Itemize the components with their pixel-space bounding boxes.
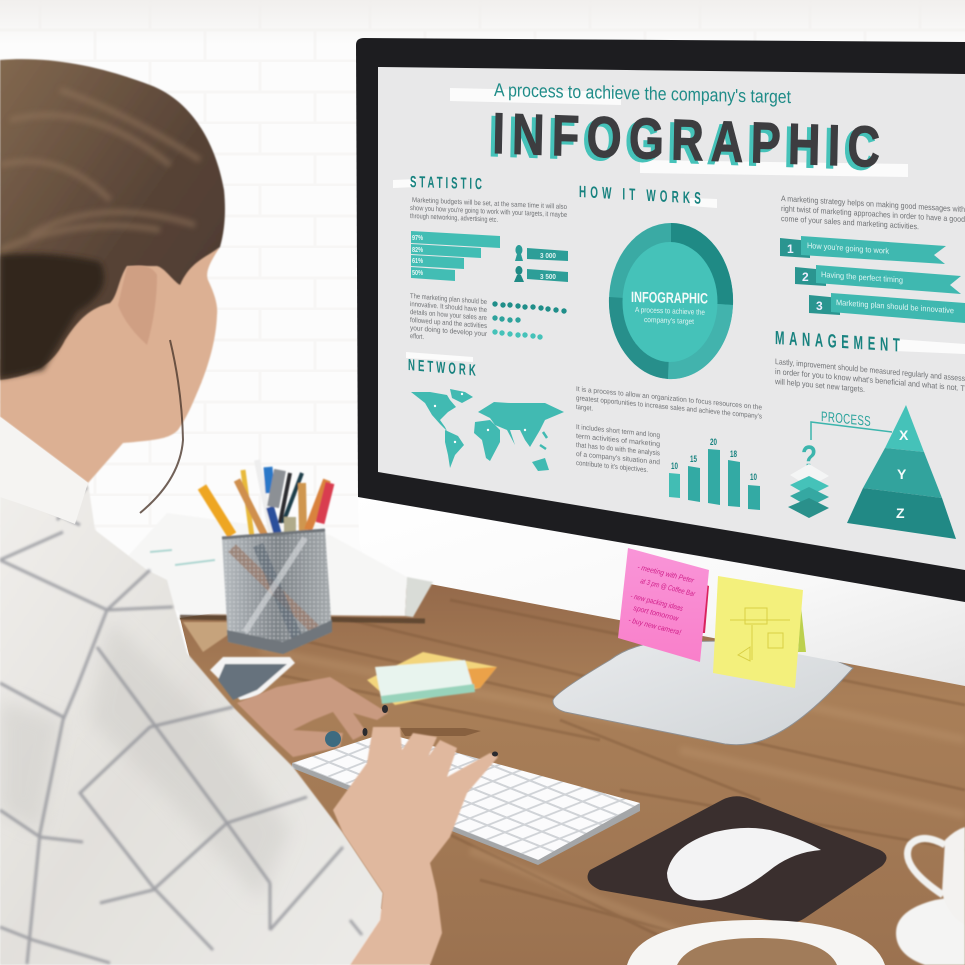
- upper hand: [237, 677, 388, 757]
- marketing strategy paragraph: [781, 194, 965, 231]
- statistic section: [410, 172, 568, 341]
- marketing plan paragraph: details on how your sales are: [410, 309, 487, 322]
- how it works heading: HOW IT WORKS: [579, 182, 701, 207]
- pyramid diagram: Z: [896, 505, 905, 521]
- people icons with counts: [514, 245, 568, 282]
- marketing strategy paragraph: come of your sales and marketing activities.: [781, 214, 919, 231]
- main title: INFOGRAPHIC: [492, 102, 881, 180]
- process heading: PROCESS: [821, 408, 871, 429]
- bar chart: 10: [750, 472, 757, 482]
- subtitle: A process to achieve the company's target: [494, 79, 791, 107]
- process paragraph: target.: [576, 404, 593, 413]
- yellow sticky note: [713, 576, 803, 688]
- pencil cup with pencils: [202, 460, 332, 654]
- percentage bars: 97%: [412, 235, 424, 242]
- ribbon 1: How you're going to work: [807, 241, 890, 256]
- pink note shadow: [700, 584, 709, 633]
- keyboard: [292, 733, 640, 865]
- right column: [774, 194, 965, 539]
- icon: question mark on layered stack: ?: [801, 439, 817, 475]
- white highlight strips: [393, 88, 965, 362]
- percentage bars: 61%: [412, 258, 424, 265]
- sticky notes: [618, 548, 806, 688]
- mouse pad and mouse: [588, 796, 887, 923]
- monitor black bezel: [356, 38, 965, 602]
- marketing plan paragraph: The marketing plan should be: [410, 293, 487, 306]
- desk phone: [210, 657, 295, 700]
- world map: [411, 389, 564, 471]
- statistic paragraph: through networking, advertising etc.: [410, 213, 498, 224]
- short term paragraph: [576, 424, 660, 474]
- pink sticky note: sport tomorrow: [633, 603, 680, 623]
- bar chart: 10: [671, 461, 678, 471]
- short term paragraph: contribute to it's objectives.: [576, 460, 648, 474]
- donut subtitle: [635, 305, 705, 326]
- percentage bars: [411, 231, 500, 281]
- pencil on desk: [400, 728, 481, 736]
- bar chart: 20: [710, 437, 717, 447]
- short term paragraph: of a company's situation and: [576, 451, 660, 466]
- icon: person 2: [514, 266, 524, 282]
- pink sticky note: - buy new camera!: [628, 615, 682, 637]
- main title: INFOGRAPHIC: [488, 105, 877, 183]
- donut subtitle: company's target: [644, 315, 695, 326]
- short term paragraph: term activities of marketing: [576, 433, 660, 448]
- management paragraph: will help you set new targets.: [774, 377, 865, 394]
- wooden desk: [180, 582, 965, 965]
- ribbon 2: Having the perfect timing: [821, 270, 903, 285]
- hair strands: [0, 90, 200, 250]
- wisp of hair: [140, 340, 183, 513]
- icon: white mouse: [667, 828, 821, 900]
- hair: [0, 59, 225, 380]
- network section: [408, 355, 564, 471]
- ribbon 3: Marketing plan should be innovative: [836, 298, 955, 315]
- marketing plan paragraph: [410, 293, 488, 341]
- icon: person 1: [515, 245, 523, 261]
- dot rating rows: [492, 301, 567, 340]
- donut subtitle: A process to achieve the: [635, 305, 705, 317]
- percentage bars: 50%: [412, 270, 424, 277]
- short term paragraph: that has to do with the analysis: [576, 442, 660, 457]
- shirt: [0, 417, 383, 965]
- people icons with counts: 3 500: [540, 272, 556, 281]
- pyramid diagram: Y: [897, 466, 907, 482]
- short term paragraph: It includes short term and long: [576, 424, 660, 439]
- percentage bars: 82%: [412, 247, 424, 254]
- icon: question mark on layered stack: [788, 439, 829, 518]
- ear: [118, 266, 157, 345]
- shirt plaid lines: [0, 487, 362, 964]
- statistic paragraph: show you how you're going to work with your targets, it maybe: [410, 205, 567, 219]
- shirt fold shading: [0, 620, 290, 900]
- pyramid diagram: X: [899, 427, 909, 443]
- pink sticky note: at 3 pm @ Coffee Bar: [640, 576, 696, 598]
- marketing plan paragraph: your doing to develop your: [410, 325, 488, 338]
- collar: [0, 417, 88, 524]
- marketing plan paragraph: innovative. It should have the: [410, 301, 487, 314]
- open book and papers behind pencil cup: [128, 513, 433, 652]
- marketing plan paragraph: followed up and the activities: [410, 317, 487, 330]
- ribbon 2: [795, 265, 961, 294]
- statistic paragraph: Marketing budgets will be set, at the same time it will also: [412, 197, 567, 211]
- pink sticky note: - meeting with Peter: [637, 562, 695, 585]
- people icons with counts: 3 000: [540, 251, 556, 260]
- monitor white chin: [358, 495, 965, 686]
- hair bun shadow: [0, 254, 104, 378]
- monitor: [356, 38, 965, 745]
- screen: [378, 67, 965, 570]
- lower hand and forearm: [333, 727, 498, 965]
- network heading: NETWORK: [408, 355, 476, 379]
- monitor stand: [553, 640, 853, 745]
- woman at desk: [0, 59, 498, 965]
- bar chart: 18: [730, 449, 737, 459]
- donut diagram: [609, 223, 733, 379]
- neck and face skin: [0, 230, 220, 483]
- ribbon 1: [780, 236, 946, 264]
- marketing plan paragraph: effort.: [410, 333, 424, 341]
- pink sticky note: [618, 548, 709, 662]
- infographic on screen: [393, 79, 965, 539]
- donut title: INFOGRAPHIC: [631, 289, 708, 308]
- bar chart: [669, 437, 760, 510]
- coffee cup and saucer: [896, 827, 965, 965]
- nail polish: [325, 705, 498, 756]
- management heading: MANAGEMENT: [775, 328, 900, 356]
- process paragraph: It is a process to allow an organization to focus resources on the: [576, 386, 762, 412]
- sticky note pad: [367, 652, 497, 705]
- ribbon 3: [809, 293, 965, 323]
- process paragraph: greatest opportunities to increase sales and achieve the company's: [576, 395, 762, 421]
- pink sticky note: - new packing ideas: [630, 591, 684, 613]
- statistic heading: STATISTIC: [410, 172, 482, 193]
- how it works section: [576, 182, 762, 510]
- ribbon 3: 3: [816, 299, 823, 313]
- connector line: [811, 422, 892, 440]
- plate with cookie: [627, 920, 885, 965]
- pyramid diagram: [847, 405, 956, 539]
- yellow note shadow: [798, 607, 806, 652]
- statistic paragraph: [410, 197, 567, 224]
- ribbon 2: 2: [802, 270, 809, 284]
- bar chart: 15: [690, 454, 697, 464]
- ribbon 1: 1: [787, 242, 794, 256]
